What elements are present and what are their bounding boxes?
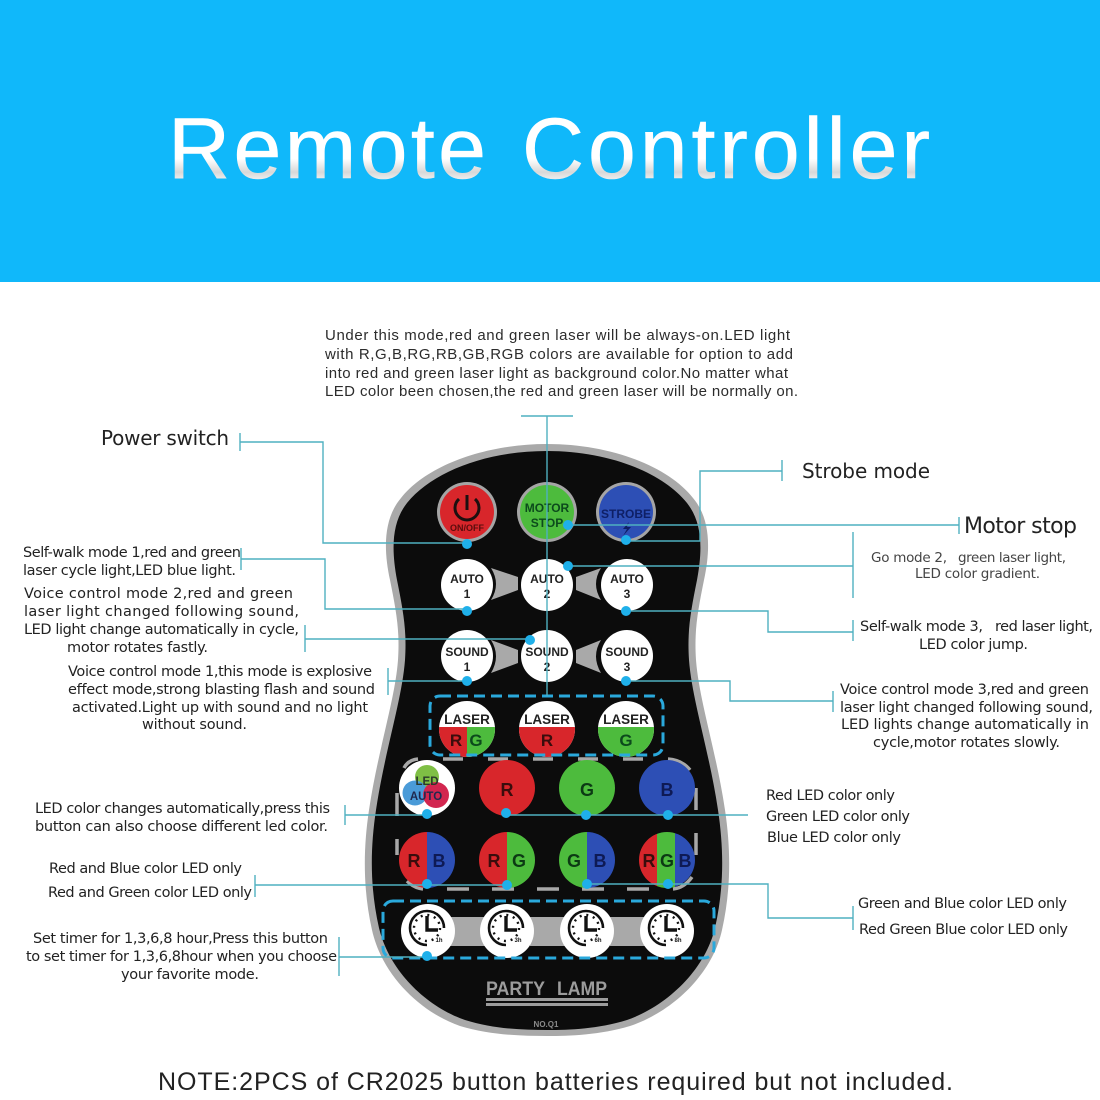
text: self-walk mode 3: LED color jump.: [919, 637, 1028, 653]
text: voice control mode 2: laser light changed following sound,: [24, 604, 299, 620]
text: red blue and red green: Red and Blue color LED only: [49, 861, 242, 877]
auto buttons: 3: [624, 587, 631, 601]
text: voice control mode 2: Voice control mode 2,red and green: [24, 586, 293, 602]
top description text: into red and green laser light as background color.No matter what: [325, 365, 789, 382]
text: voice control mode 1: [68, 664, 375, 733]
text: go mode 2: LED color gradient.: [915, 566, 1040, 582]
mixed colour buttons: [399, 832, 695, 888]
LED auto button: AUTO: [410, 791, 442, 803]
text: self-walk mode 1: [23, 545, 241, 579]
auto buttons: AUTO: [450, 572, 484, 586]
timer dashed group: [383, 901, 714, 958]
text: voice control mode 2: LED light change automatically in cycle,: [24, 622, 299, 638]
laser buttons: LASER: [444, 712, 490, 727]
label: motor stop: Motor stop: [964, 514, 1077, 539]
party lamp logo: NO.Q1: [534, 1020, 559, 1029]
text: voice control mode 1: without sound.: [142, 717, 247, 733]
auto buttons: [441, 559, 653, 611]
mixed colour buttons: R: [642, 851, 656, 871]
text: green blue and rgb: [858, 896, 1068, 938]
timer connector bars: [450, 917, 650, 946]
button: on/off: [437, 482, 497, 542]
text: voice control mode 3: cycle,motor rotates slowly.: [873, 735, 1060, 751]
button: motor stop: STOP: [531, 516, 563, 530]
top description text: [324, 327, 798, 400]
callout dots: [422, 520, 673, 961]
party lamp logo: PARTY: [486, 979, 545, 1000]
single colour buttons: G: [580, 780, 594, 800]
mixed colour buttons: B: [432, 851, 446, 871]
mixed colour buttons: G: [660, 851, 674, 871]
mixed colour buttons: B: [594, 851, 606, 871]
text: voice control mode 1: effect mode,strong blasting flash and sound: [68, 682, 375, 698]
top description text: with R,G,B,RG,RB,GB,RGB colors are available for option to add: [324, 346, 793, 363]
top description text: LED color been chosen,the red and green laser will be normally on.: [325, 383, 798, 400]
text: go mode 2: green laser light,: [958, 550, 1066, 566]
party lamp logo: LAMP: [557, 979, 607, 1000]
grey dashed frame decoration: [443, 757, 646, 761]
text: green blue and rgb: Red Green Blue color LED only: [859, 922, 1068, 938]
sound buttons: [441, 630, 653, 682]
LED auto button: LED: [416, 776, 438, 788]
mixed colour buttons: R: [408, 851, 420, 871]
header banner: [0, 0, 1100, 282]
laser buttons: R: [450, 731, 462, 750]
text: go mode 2: Go mode 2,: [871, 550, 947, 566]
auto buttons: 1: [464, 587, 471, 601]
text: timer: your favorite mode.: [121, 967, 259, 983]
laser buttons: R: [541, 731, 553, 750]
sound buttons: 3: [624, 660, 631, 674]
laser buttons: G: [469, 731, 483, 750]
sound buttons: SOUND: [605, 645, 649, 659]
sound buttons: 2: [544, 660, 551, 674]
mixed colour buttons: G: [567, 851, 581, 871]
timer buttons: 3h: [514, 938, 522, 944]
text: voice control mode 1: activated.Light up with sound and no light: [72, 700, 368, 716]
text: led colour auto: button can also choose different led color.: [35, 819, 328, 835]
text: timer: to set timer for 1,3,6,8hour when you choose: [26, 949, 337, 965]
label: strobe mode: Strobe mode: [802, 459, 930, 483]
battery note: NOTE:2PCS of CR2025 button batteries required but not included.: [158, 1068, 953, 1096]
text: self-walk mode 3: [860, 619, 1093, 653]
sound buttons: 1: [464, 660, 471, 674]
text: self-walk mode 3: Self-walk mode 3,: [860, 619, 983, 635]
button: strobe: [596, 482, 656, 542]
button: motor stop: [517, 482, 577, 542]
timer buttons: 8h: [674, 938, 682, 944]
top description text: Under this mode,red and green laser will be always-on.LED light: [325, 327, 791, 344]
laser buttons: LASER: [524, 712, 570, 727]
button: strobe: STROBE: [601, 507, 651, 521]
text: voice control mode 3: LED lights change automatically in: [841, 717, 1089, 733]
text: green blue and rgb: Green and Blue color LED only: [858, 896, 1067, 912]
single colour buttons: [479, 760, 695, 816]
title: Remote: [168, 101, 486, 197]
laser buttons: LASER: [603, 712, 649, 727]
laser buttons: [439, 701, 654, 759]
text: led colour auto: LED color changes automatically,press this: [35, 801, 330, 817]
sound buttons: SOUND: [525, 645, 569, 659]
text: red blue and red green: [48, 861, 252, 901]
text: voice control mode 2: [24, 586, 299, 656]
button: on/off: ON/OFF: [450, 523, 484, 533]
text: single colour LEDs: [766, 788, 910, 846]
auto and sound connector shapes: [491, 568, 601, 673]
auto buttons: AUTO: [530, 572, 564, 586]
callout leader lines: [240, 416, 959, 976]
text: red blue and red green: Red and Green color LED only: [48, 885, 252, 901]
auto buttons: AUTO: [610, 572, 644, 586]
text: voice control mode 3: Voice control mode 3,red and green: [840, 682, 1089, 698]
single colour buttons: B: [660, 780, 674, 800]
text: self-walk mode 1: laser cycle light,LED blue light.: [23, 563, 236, 579]
text: timer: [26, 931, 337, 983]
single colour buttons: R: [500, 780, 514, 800]
text: timer: Set timer for 1,3,6,8 hour,Press this button: [33, 931, 328, 947]
party lamp logo: [486, 979, 608, 1029]
mixed colour buttons: R: [488, 851, 500, 871]
text: self-walk mode 3: red laser light,: [995, 619, 1093, 635]
mixed colour buttons: B: [678, 851, 692, 871]
text: single colour LEDs: Blue LED color only: [767, 830, 901, 846]
title: Controller: [522, 101, 930, 197]
label: power switch: Power switch: [101, 426, 229, 450]
timer buttons: 6h: [594, 938, 602, 944]
text: voice control mode 1: Voice control mode 1,this mode is explosive: [68, 664, 372, 680]
text: voice control mode 2: motor rotates fastly.: [67, 640, 208, 656]
button: motor stop: MOTOR: [525, 501, 570, 515]
timer buttons: [401, 904, 694, 958]
text: led colour auto: [35, 801, 330, 835]
timer buttons: 1h: [435, 938, 443, 944]
auto buttons: 2: [544, 587, 551, 601]
text: go mode 2: [871, 550, 1066, 582]
remote controller body: [365, 444, 729, 1036]
LED auto button: [399, 760, 455, 816]
laser dashed group: [430, 696, 663, 755]
text: single colour LEDs: Red LED color only: [766, 788, 895, 804]
laser buttons: G: [619, 731, 633, 750]
sound buttons: SOUND: [445, 645, 489, 659]
text: self-walk mode 1: Self-walk mode 1,red and green: [23, 545, 241, 561]
text: voice control mode 3: [840, 682, 1093, 751]
text: voice control mode 3: laser light changed following sound,: [840, 700, 1093, 716]
mixed colour buttons: G: [512, 851, 526, 871]
text: single colour LEDs: Green LED color only: [766, 809, 910, 825]
title: [168, 101, 930, 197]
